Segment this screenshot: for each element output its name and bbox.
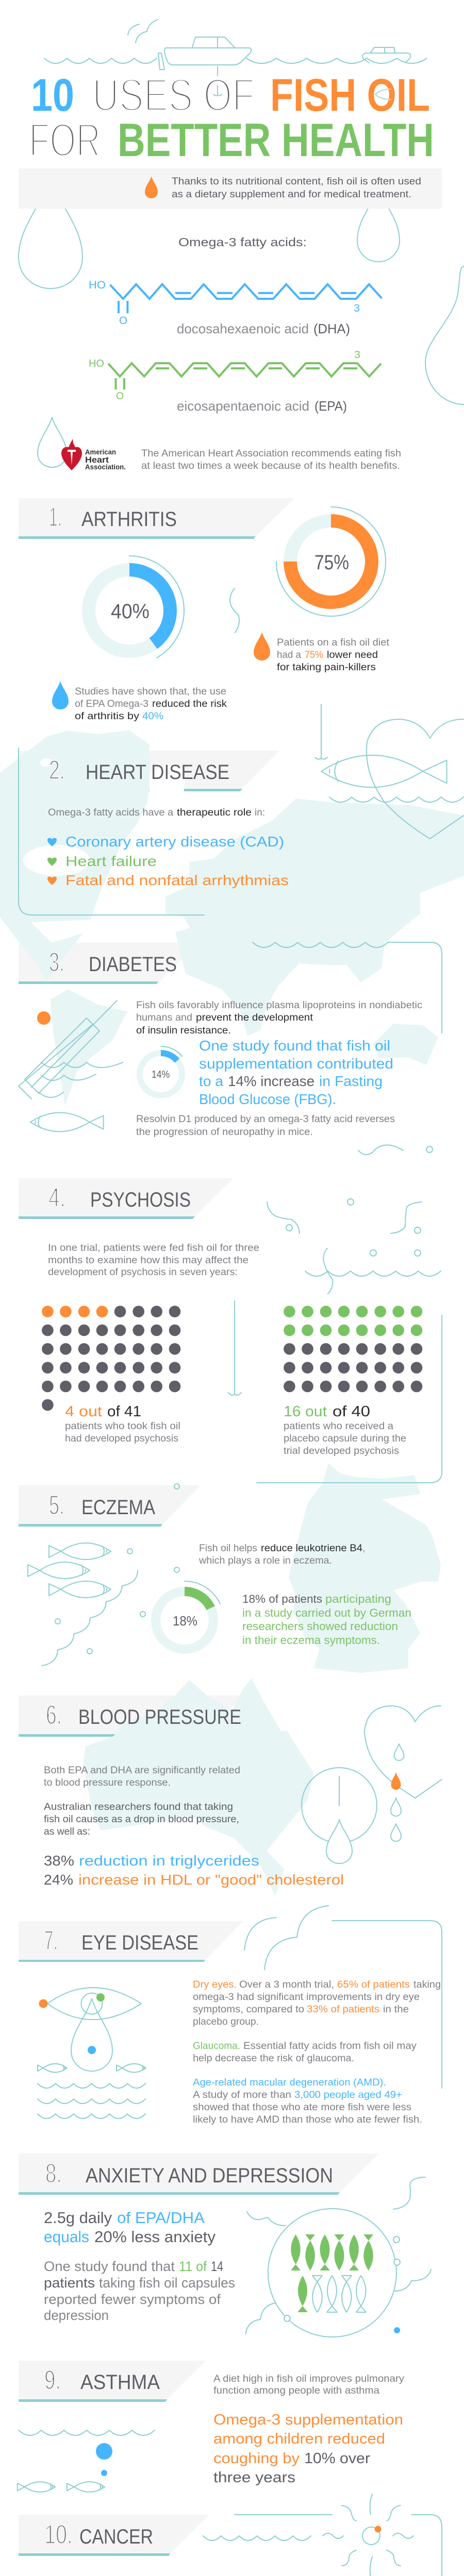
heading: omega-3: Omega-3 fatty acids:: [178, 235, 307, 249]
stat: less anxiety: of EPA/DHA: [117, 2209, 205, 2227]
heading bands 2 and 3 under map: [19, 751, 279, 984]
heading: HEART DISEASE: [86, 761, 229, 784]
callout: FBG: in Fasting: [319, 1073, 383, 1089]
callout: 40%: Studies have shown that, the use: [75, 686, 226, 697]
stat: less anxiety: 20% less anxiety: [94, 2228, 216, 2246]
callout: 4 of 41: patients who took fish oil: [65, 1421, 180, 1432]
title line 1: [31, 69, 430, 121]
callout: 16 of 40: of 40: [333, 1403, 370, 1420]
intro text: Thanks to its nutritional content, fish oil is often used: [172, 176, 421, 187]
frame with waves: [253, 942, 442, 1033]
callout: 40%: 40%: [142, 711, 163, 722]
background: world map: [0, 730, 464, 1106]
text: leukotriene: reduce leukotriene B4: [261, 1543, 362, 1554]
heading text: [46, 1700, 241, 1730]
decorative drop far right: [425, 266, 464, 404]
text: leukotriene: which plays a role in eczema.: [198, 1555, 332, 1566]
item: arrhythmias: Fatal and nonfatal arrhythmias: [65, 872, 289, 888]
intro text: [48, 1243, 259, 1278]
icon: fish: [321, 755, 447, 787]
section 9: asthma: [18, 2361, 405, 2492]
AHA text: [141, 448, 401, 471]
intro text: as a dietary supplement and for medical treatment.: [172, 189, 411, 200]
icon: net and waves: [19, 1001, 123, 1099]
text: AMD: 3,000 people aged 49+: [294, 2090, 402, 2100]
background: map of Australia: [83, 1678, 313, 1896]
text: A diet high in fish oil improves pulmonary: [213, 2374, 405, 2384]
text: dry eyes: Dry eyes.: [193, 1979, 237, 1990]
text: AMD: showed that those who ate more fish were less: [193, 2102, 411, 2113]
text: glaucoma: help decrease the risk of glaucoma.: [193, 2053, 354, 2064]
heading band: 1.: [49, 502, 62, 532]
item: heart failure: Heart failure: [65, 853, 157, 869]
section 8: anxiety and depression: [19, 2154, 431, 2337]
stat: less anxiety: 2.5g daily: [44, 2209, 112, 2227]
AHA text: The American Heart Association recommends eating fish: [141, 448, 401, 459]
text block: [136, 1000, 422, 1036]
callout: 16 of 40: trial developed psychosis: [284, 1446, 399, 1456]
heading text: 6.: [46, 1700, 62, 1730]
stats: reduction in triglycerides: [79, 1853, 259, 1869]
heading band: ARTHRITIS: [81, 508, 177, 531]
callout: 75%: had a: [277, 650, 301, 660]
heading: [19, 1178, 233, 1219]
chart: EPA molecule: O: [116, 391, 124, 402]
callout: 75%: for taking pain-killers: [277, 662, 376, 673]
waves: [19, 2430, 155, 2435]
icon: fish bowl: [268, 2209, 396, 2337]
intro text: [48, 807, 265, 818]
fish one: [49, 1543, 111, 1560]
heading: 4.: [48, 1183, 65, 1213]
stats: 24%: [44, 1872, 73, 1888]
callout: 75%: 75%: [305, 650, 323, 660]
waves left: [44, 58, 157, 63]
icon: orange drop: [254, 632, 270, 660]
text: depression study: 11 of: [179, 2259, 207, 2274]
intro text: months to examine how this may affect the: [48, 1255, 248, 1266]
callout: coughing: 10% over: [304, 2450, 370, 2467]
decorative squiggle: [230, 588, 239, 633]
callout: coughing: Omega-3 supplementation: [213, 2412, 403, 2428]
heading: 7.: [44, 1926, 58, 1956]
heading: [49, 755, 229, 785]
text: glaucoma: [193, 2041, 417, 2064]
text: dry eyes: taking: [413, 1979, 441, 1990]
text: function among people with asthma: [213, 2385, 379, 2396]
logo text: Heart: [85, 455, 109, 465]
fish two: [28, 1562, 90, 1579]
chart: fish capsules 11 of 14: [291, 2234, 373, 2312]
heading text: BLOOD PRESSURE: [78, 1706, 241, 1728]
callout: 4 of 41: of 41: [107, 1403, 141, 1420]
text: resolvin: the progression of neuropathy in mice.: [136, 1127, 313, 1138]
section 2: heart disease: [19, 704, 463, 915]
callout: 18%: 18% of patients: [242, 1592, 322, 1605]
text block: Both EPA and DHA are significantly related: [44, 1765, 240, 1776]
title line 1: FISH OIL: [270, 69, 430, 121]
text: glaucoma: Essential fatty acids from fish oil may: [243, 2041, 417, 2052]
icon: sun: [323, 2494, 413, 2576]
callout: 75%: [277, 637, 390, 673]
text: AMD: likely to have AMD than those who ate fewer fish.: [193, 2114, 422, 2125]
icon: bubbles: [96, 2443, 112, 2476]
icon: fishing line and heart: [315, 704, 463, 839]
decorative drop: [38, 417, 67, 467]
heading: [19, 1921, 243, 1962]
text block: humans and: [136, 1012, 192, 1023]
section 6: blood pressure: [19, 1678, 442, 1896]
title: [29, 69, 434, 166]
chart: EPA molecule: [89, 349, 381, 414]
heading: ANXIETY AND DEPRESSION: [86, 2164, 333, 2187]
heading: DIABETES: [89, 953, 177, 976]
logo text: American: [85, 448, 116, 456]
callout: 18%: [242, 1592, 411, 1647]
heading: 3.: [49, 947, 64, 977]
frame and clouds: [244, 1906, 442, 2088]
waves: [38, 2083, 145, 2119]
heading: [19, 2154, 379, 2195]
logo text: [85, 448, 126, 471]
callout: 40%: [75, 686, 227, 722]
label: DHA: docosahexaenoic acid: [177, 321, 309, 336]
text: depression study: 14: [211, 2259, 223, 2274]
heading: CANCER: [79, 2526, 153, 2548]
icon: orange drop: [145, 176, 158, 198]
icon: three fish: [28, 1543, 111, 1598]
heading band: [19, 1696, 243, 1737]
callout: coughing: among children reduced: [213, 2431, 385, 2447]
heading: 5.: [49, 1490, 64, 1520]
text: dry eyes: in the: [383, 2004, 409, 2015]
callout: 16 of 40: patients who received a: [284, 1421, 393, 1432]
North America: [0, 730, 150, 981]
Africa: [175, 922, 289, 1036]
stats: [44, 1853, 344, 1888]
intro text: [172, 176, 421, 200]
icon: heart outline: [364, 1706, 442, 1798]
text: resolvin: Resolvin D1 produced by an omega-3 fatty acid reverses: [136, 1114, 395, 1125]
section 3: diabetes: [19, 942, 442, 1155]
label: EPA: (EPA): [314, 398, 347, 414]
chart: dots 16 of 40: [284, 1306, 422, 1392]
text: dry eyes: 33% of patients: [307, 2004, 379, 2015]
text: AMD: A study of more than: [193, 2090, 291, 2100]
callout: 40%: of EPA Omega-3: [75, 699, 148, 709]
icon: birds: [128, 20, 158, 43]
title line 1: 10: [31, 69, 74, 121]
row one: [291, 2234, 373, 2270]
decorative squiggle and bubble: [358, 1145, 433, 1155]
section 5: eczema: [19, 1484, 411, 1666]
stats: increase in HDL or "good" cholesterol: [78, 1872, 344, 1888]
chart: 75% donut: [276, 507, 386, 616]
heading: [19, 2361, 206, 2402]
intro text: development of psychosis in seven years:: [48, 1267, 238, 1278]
heading: 9.: [44, 2365, 61, 2395]
chart: DHA molecule: O: [119, 315, 127, 327]
chart: 40% donut: [75, 556, 184, 665]
text block: as well as:: [44, 1826, 90, 1837]
chart: DHA molecule: 3: [354, 302, 360, 314]
callout: FBG: One study found that fish oil: [199, 1038, 390, 1054]
fishing line: [217, 66, 218, 76]
South America: [51, 989, 127, 1106]
callout: coughing: three years: [213, 2469, 295, 2486]
callout: coughing: coughing by: [213, 2450, 300, 2467]
fish three: [49, 1581, 111, 1598]
text: [213, 2374, 405, 2396]
row two: [297, 2276, 308, 2312]
heading: 2.: [49, 755, 65, 785]
icon: small boat: [362, 47, 410, 63]
text block: prevent the development: [196, 1012, 313, 1023]
icon: fish pair: [18, 2482, 105, 2492]
heading: EYE DISEASE: [81, 1931, 198, 1954]
chart: DHA molecule: [89, 279, 382, 336]
Eurasia: [165, 799, 464, 989]
icon: eye with drop: [39, 1988, 141, 2071]
heading: 8.: [45, 2159, 62, 2189]
callout: 18%: participating: [325, 1592, 391, 1605]
chart: 18% donut: 18%: [173, 1613, 197, 1629]
text: depression study: taking fish oil capsules: [99, 2275, 235, 2291]
text block: of insulin resistance.: [136, 1025, 231, 1036]
text: depression study: depression: [44, 2308, 109, 2323]
text: leukotriene: ,: [362, 1543, 365, 1554]
heading: [49, 947, 177, 977]
chart: dots 4 of 41: [42, 1306, 180, 1411]
decorative drop right: [357, 185, 400, 262]
callout: 75%: lower need: [327, 650, 378, 660]
callout: FBG: supplementation contributed: [199, 1056, 393, 1072]
section 10: cancer: [19, 2494, 442, 2576]
title line 2: FOR: [29, 114, 101, 166]
stat: less anxiety: equals: [44, 2228, 89, 2246]
callout: 4 of 41: [65, 1403, 180, 1444]
callout: 40%: reduced the risk: [152, 699, 227, 709]
callout: FBG: Blood Glucose (FBG).: [199, 1091, 336, 1107]
callout: FBG: to a: [199, 1073, 223, 1089]
chart: 14% donut: [133, 1046, 189, 1102]
text: depression study: reported fewer symptoms of: [44, 2292, 221, 2307]
heading: [19, 1485, 201, 1527]
chart: EPA molecule: 3: [354, 349, 360, 361]
intro text: in:: [255, 807, 265, 818]
text: leukotriene: Fish oil helps: [199, 1543, 257, 1554]
text: dry eyes: 65% of patients: [337, 1979, 410, 1990]
text block: Fish oils favorably influence plasma lipoproteins in nondiabetic: [136, 1000, 422, 1011]
intro text: therapeutic role: [177, 807, 252, 818]
white lakes: [23, 758, 186, 943]
heading: 10.: [44, 2520, 73, 2550]
waves right: [246, 58, 427, 63]
callout: 16 of 40: [284, 1403, 406, 1456]
text block: fish oil causes as a drop in blood pressure,: [44, 1814, 239, 1825]
text: glaucoma: Glaucoma.: [193, 2041, 240, 2052]
callout: 75%: Patients on a fish oil diet: [277, 637, 390, 648]
callout: 4 of 41: had developed psychosis: [65, 1433, 178, 1444]
stats: 38%: [44, 1853, 74, 1869]
icon: fishing boat: [158, 37, 251, 70]
stat: less anxiety: [44, 2209, 216, 2246]
decorative curves: [245, 2177, 431, 2334]
frame: [235, 2515, 442, 2576]
icon: hook divider: [228, 1301, 241, 1395]
text: leukotriene: [198, 1543, 365, 1566]
text: resolvin: [136, 1114, 395, 1138]
callout: 18%: in a study carried out by German: [242, 1606, 411, 1619]
text block: to blood pressure response.: [44, 1777, 171, 1788]
callout: 40%: of arthritis by: [75, 711, 140, 722]
callout: 4 of 41: 4 out: [65, 1403, 102, 1420]
text: depression study: [44, 2259, 235, 2323]
background: map of Germany: [289, 1463, 441, 1673]
panel: American Heart Association: [38, 417, 401, 471]
text block: Australian researchers found that taking: [44, 1802, 233, 1812]
label: EPA: eicosapentaenoic acid: [177, 398, 309, 414]
label: DHA: (DHA): [313, 321, 350, 336]
decorative bubbles and scallops: [42, 1484, 179, 1666]
text: AMD: [193, 2077, 422, 2125]
heading band: [19, 498, 294, 539]
frame: psychosis corner: [257, 1315, 442, 1483]
chart: 18% donut: [145, 1581, 224, 1659]
chart: 14% donut: 14%: [152, 1069, 170, 1080]
icon: orange ball: [37, 1011, 51, 1025]
logo text: Association.: [85, 463, 126, 471]
heading: PSYCHOSIS: [90, 1189, 191, 1211]
text: dry eyes: [193, 1979, 441, 2027]
text: dry eyes: omega-3 had significant improvements in dry eye: [193, 1992, 420, 2003]
frame: [19, 748, 204, 915]
icon: blood pressure gauge: [302, 1768, 377, 1863]
text: dry eyes: symptoms, compared to: [193, 2004, 304, 2015]
icon: small fish: [38, 2064, 146, 2072]
chart: DHA molecule: HO: [89, 279, 106, 291]
callout: 16 of 40: placebo capsule during the: [284, 1433, 406, 1444]
icon: fish: [30, 1113, 104, 1131]
heading: [19, 2515, 209, 2556]
icon: hook and fish in title: [213, 86, 391, 99]
text: AMD: Age-related macular degeneration (AMD).: [193, 2077, 386, 2088]
icon: blue drop: [52, 681, 69, 709]
text block: [44, 1765, 240, 1837]
callout: 18%: in their eczema symptoms.: [242, 1634, 380, 1647]
decorative curves and bubbles: [267, 1199, 441, 1294]
text: depression study: One study found that: [44, 2259, 175, 2274]
list: [47, 834, 289, 888]
text: dry eyes: placebo group.: [193, 2016, 259, 2027]
intro text: In one trial, patients were fed fish oil for three: [48, 1243, 259, 1253]
callout: coughing: [213, 2412, 403, 2486]
icon: heart logo: [61, 439, 82, 470]
waves: [329, 797, 463, 802]
callout: FBG: [199, 1038, 393, 1107]
chart: EPA molecule: HO: [89, 358, 104, 369]
chart: 40% donut: 40%: [111, 600, 150, 623]
section 7: eye disease: [19, 1906, 442, 2125]
panel: intro band: [19, 168, 442, 289]
item: CAD: Coronary artery disease (CAD): [65, 834, 284, 850]
AHA text: at least two times a week because of its health benefits.: [141, 461, 400, 471]
heading: ECZEMA: [81, 1496, 155, 1519]
callout: 16 of 40: 16 out: [284, 1403, 327, 1420]
Australia: [373, 1024, 438, 1065]
waves: [203, 2536, 311, 2540]
intro text: Omega-3 fatty acids have a: [48, 807, 173, 818]
callout: FBG: 14% increase: [228, 1073, 314, 1089]
text: dry eyes: Over a 3 month trial,: [239, 1979, 334, 1990]
heading: ASTHMA: [80, 2371, 160, 2394]
header illustration: boats and birds: [44, 20, 427, 76]
section 1: arthritis: [19, 498, 390, 722]
title line 1: USES OF: [92, 69, 255, 121]
icon: drops: [391, 1744, 404, 1841]
section 4: psychosis: [19, 1178, 441, 1456]
text: depression study: patients: [44, 2275, 95, 2291]
callout: 18%: researchers showed reduction: [242, 1620, 398, 1633]
decorative drop left: [19, 177, 82, 289]
bubbles: [284, 2236, 400, 2333]
chart: 75% donut: 75%: [314, 551, 349, 574]
